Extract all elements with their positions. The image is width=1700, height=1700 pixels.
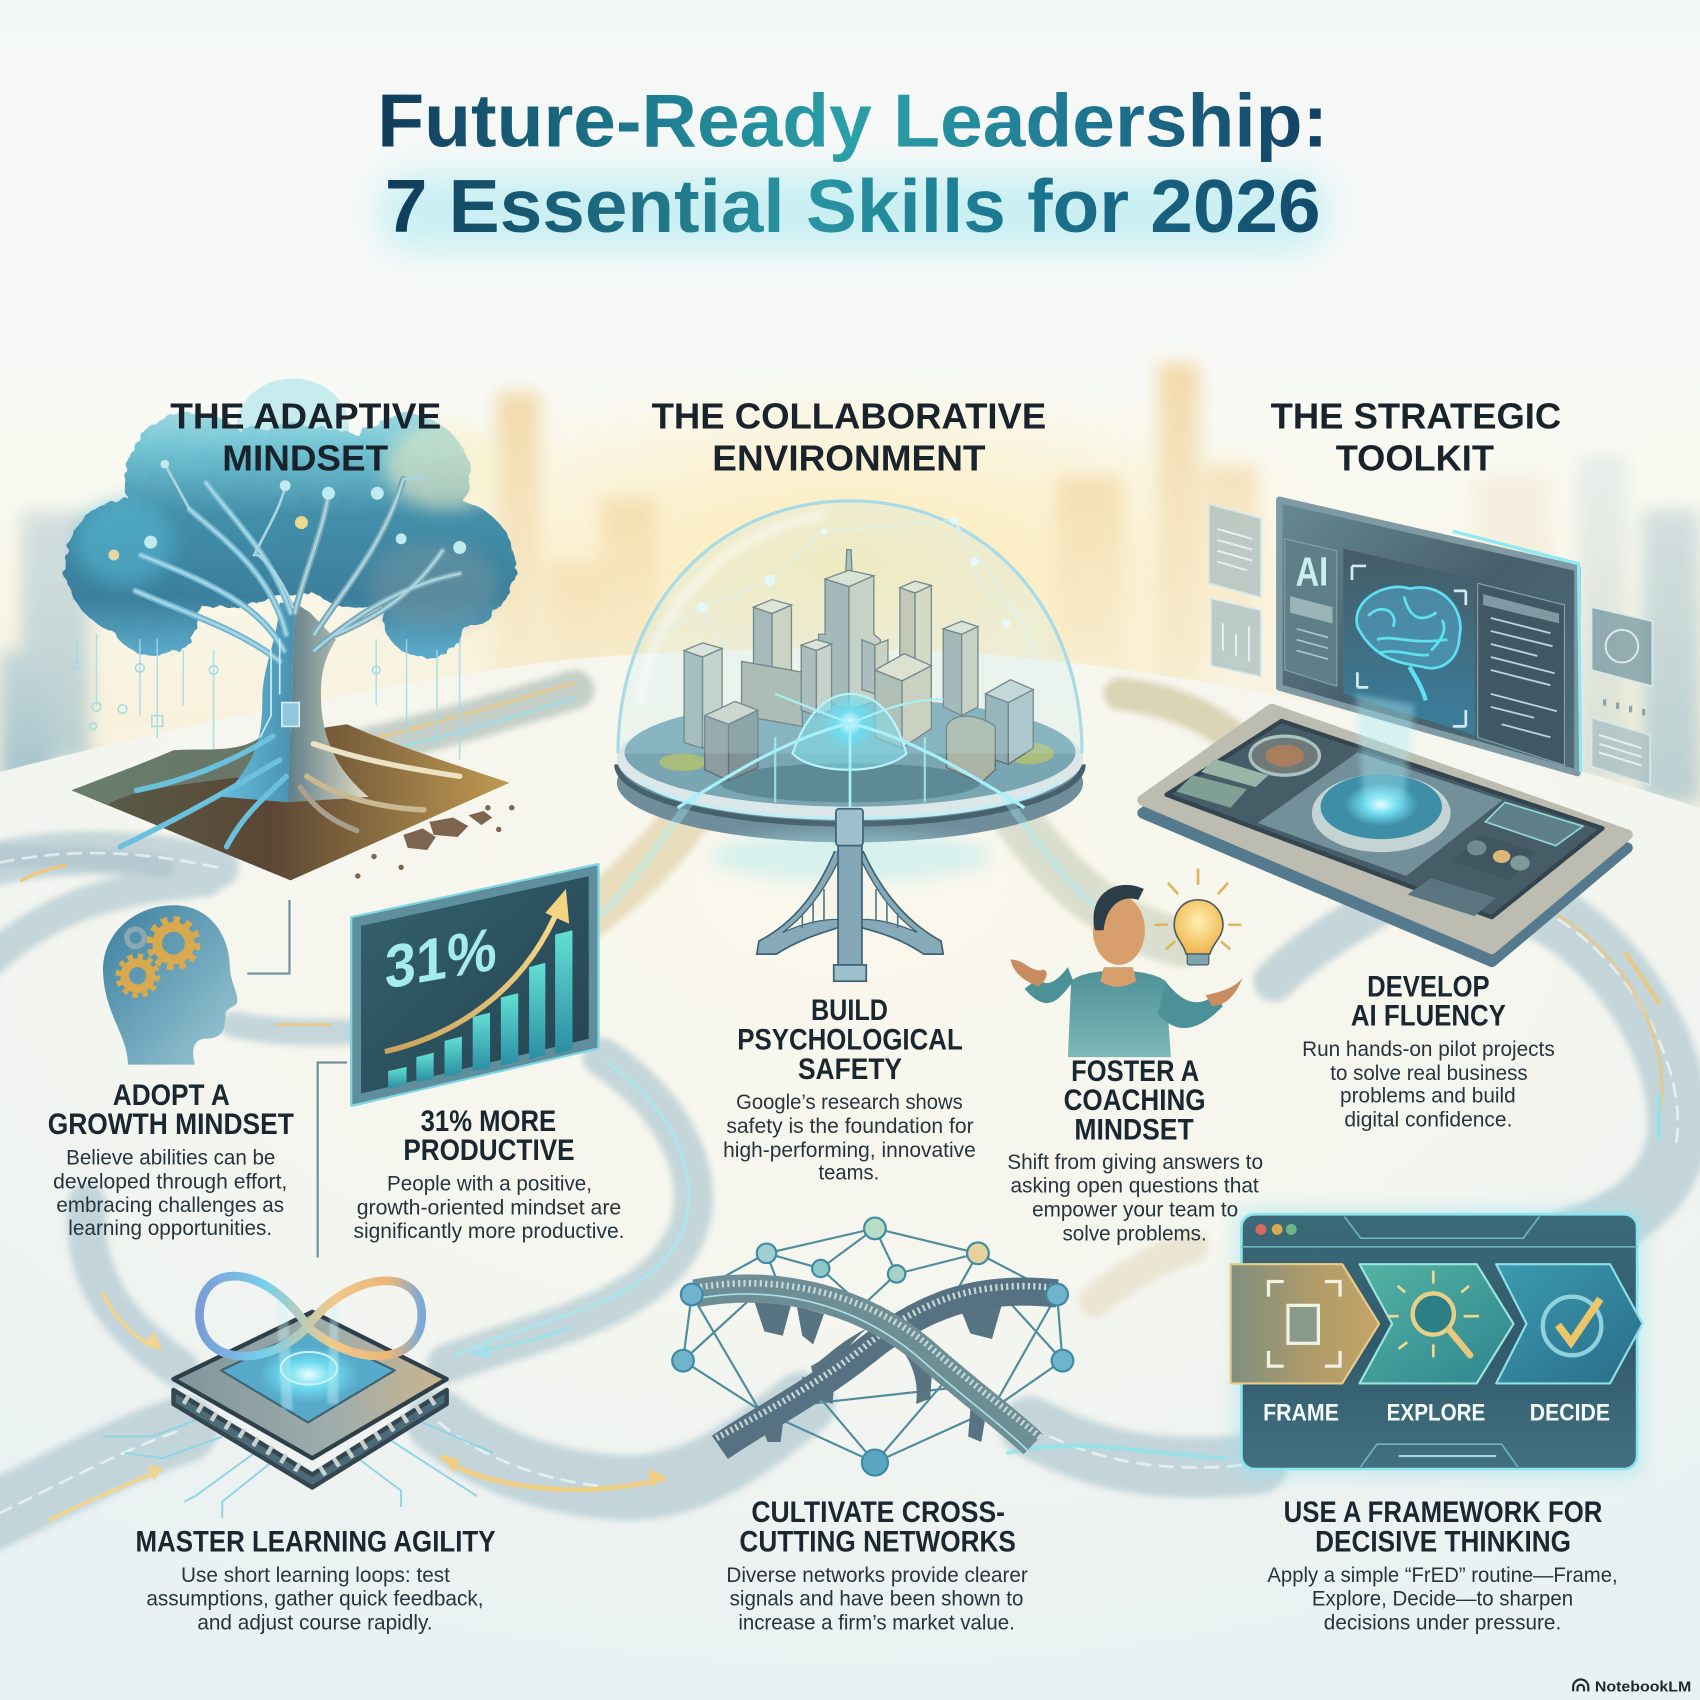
text block: 31% more productive <box>353 1106 624 1243</box>
tree crown <box>65 378 515 657</box>
tree trunk and branches <box>74 460 466 847</box>
panel: FrED framework <box>1231 1208 1645 1478</box>
explore chevron <box>1360 1264 1514 1383</box>
text block: develop AI fluency <box>1302 971 1555 1131</box>
text block: adopt a growth mindset: GROWTH MINDSET <box>48 1109 294 1141</box>
dome buildings <box>684 550 1033 783</box>
title: 7 Essential Skills for 2026 <box>385 164 1321 248</box>
text block: build psychological safety: SAFETY <box>798 1054 902 1086</box>
dome base <box>617 698 1083 842</box>
connector lines <box>247 900 347 1258</box>
side holo panels <box>1209 504 1652 785</box>
person <box>1010 885 1242 1057</box>
text block: 31% more productive: 31% MORE <box>421 1106 556 1138</box>
title: Future-Ready Leadership: <box>377 78 1328 162</box>
section heading: adaptive mindset: THE ADAPTIVE <box>170 396 441 436</box>
text block: foster a coaching mindset: empower your team to <box>1032 1196 1238 1221</box>
text block: 31% more productive: PRODUCTIVE <box>403 1135 575 1167</box>
growth arrow <box>385 889 569 1052</box>
section heading: strategic toolkit <box>1271 396 1561 479</box>
step labels: FRAME <box>1263 1399 1339 1426</box>
text block: develop AI fluency: DEVELOP <box>1367 971 1490 1003</box>
title <box>377 78 1328 252</box>
icon: head with gears <box>103 905 237 1065</box>
crossing bridges <box>695 1283 1057 1451</box>
text block: adopt a growth mindset <box>48 1080 294 1240</box>
step labels: DECIDE <box>1530 1399 1610 1426</box>
illustration: cross-cutting network bridges <box>672 1218 1073 1476</box>
text block: adopt a growth mindset: learning opportunities. <box>68 1215 272 1240</box>
text block: foster a coaching mindset <box>1007 1056 1263 1245</box>
text block: develop AI fluency: to solve real business <box>1330 1060 1528 1085</box>
floor plane <box>0 648 1700 1700</box>
dome glass <box>618 501 1082 754</box>
text block: 31% more productive: People with a positive, <box>387 1170 592 1195</box>
decide chevron <box>1496 1264 1643 1383</box>
text block: framework for decisive thinking: Apply a simple “FrED” routine—Frame, <box>1267 1562 1618 1587</box>
section heading: adaptive mindset <box>170 396 441 479</box>
text block: build psychological safety: teams. <box>819 1160 879 1185</box>
text block: build psychological safety: safety is the foundation for <box>726 1113 974 1138</box>
step labels <box>1263 1399 1610 1426</box>
text block: adopt a growth mindset: embracing challenges as <box>56 1192 284 1217</box>
NotebookLM watermark: NotebookLM <box>1595 1678 1691 1695</box>
text block: master learning agility <box>136 1526 496 1635</box>
text block: framework for decisive thinking: USE A FRAMEWORK FOR <box>1284 1497 1602 1529</box>
text block: develop AI fluency: problems and build <box>1340 1083 1516 1108</box>
text block: foster a coaching mindset: MINDSET <box>1074 1114 1194 1146</box>
illustration: dome city <box>600 501 1117 981</box>
illustration: AI screen and tablet <box>1143 500 1652 962</box>
main AI screen: AI <box>1296 548 1328 594</box>
section heading: adaptive mindset: MINDSET <box>222 439 388 479</box>
text block: foster a coaching mindset: asking open questions that <box>1010 1173 1259 1198</box>
step labels: EXPLORE <box>1387 1399 1485 1426</box>
text block: cultivate cross-cutting networks: increase a firm’s market value. <box>738 1610 1015 1635</box>
text block: master learning agility: and adjust course rapidly. <box>197 1610 433 1635</box>
text block: cultivate cross-cutting networks: signals and have been shown to <box>730 1586 1023 1611</box>
window dots <box>1255 1224 1297 1235</box>
text block: 31% more productive: growth-oriented mindset are <box>357 1194 621 1219</box>
text block: master learning agility: MASTER LEARNING AGILITY <box>136 1526 496 1558</box>
chip body <box>173 1296 447 1488</box>
illustration: adaptive tree <box>65 378 515 880</box>
text block: framework for decisive thinking <box>1267 1497 1618 1635</box>
chart panel: 31% productive: 31% <box>385 915 497 1002</box>
section heading: collaborative environment: ENVIRONMENT <box>712 439 986 479</box>
chart panel: 31% productive <box>351 864 598 1106</box>
main AI screen <box>1279 500 1581 773</box>
tree soil <box>72 724 514 880</box>
text block: cultivate cross-cutting networks: Diverse networks provide clearer <box>726 1562 1028 1587</box>
text block: adopt a growth mindset: Believe abilities can be <box>66 1144 275 1169</box>
section heading: strategic toolkit: THE STRATEGIC <box>1271 396 1561 436</box>
text block: develop AI fluency: Run hands-on pilot projects <box>1302 1036 1555 1061</box>
text block: foster a coaching mindset: solve problems. <box>1062 1220 1207 1245</box>
text block: develop AI fluency: AI FLUENCY <box>1351 1001 1506 1033</box>
text block: cultivate cross-cutting networks: CUTTING NETWORKS <box>739 1526 1016 1558</box>
section heading: collaborative environment: THE COLLABORATIVE <box>652 396 1046 436</box>
text block: develop AI fluency: digital confidence. <box>1344 1106 1512 1131</box>
text block: build psychological safety: high-performing, innovative <box>723 1137 976 1162</box>
text block: master learning agility: Use short learning loops: test <box>181 1562 450 1587</box>
text block: adopt a growth mindset: developed through effort, <box>53 1168 287 1193</box>
dome network glow <box>600 694 1117 922</box>
text block: foster a coaching mindset: Shift from giving answers to <box>1007 1149 1263 1174</box>
tablet <box>1143 694 1627 962</box>
flowing roads <box>0 683 1678 1523</box>
text block: cultivate cross-cutting networks: CULTIVATE CROSS- <box>751 1497 1005 1529</box>
text block: framework for decisive thinking: decisions under pressure. <box>1324 1610 1561 1635</box>
text block: adopt a growth mindset: ADOPT A <box>113 1080 230 1112</box>
illustration: chip with infinity loop <box>103 1276 493 1518</box>
bridge tower <box>757 809 943 981</box>
illustration: coach with lightbulb <box>1010 870 1242 1057</box>
text block: framework for decisive thinking: Explore, Decide—to sharpen <box>1312 1586 1573 1611</box>
text block: foster a coaching mindset: FOSTER A <box>1071 1056 1199 1088</box>
text block: build psychological safety: Google’s research shows <box>736 1089 963 1114</box>
text block: framework for decisive thinking: DECISIVE THINKING <box>1315 1526 1571 1558</box>
section heading: collaborative environment <box>652 396 1046 479</box>
infinity loop <box>199 1276 422 1356</box>
text block: 31% more productive: significantly more productive. <box>353 1218 624 1243</box>
chip wires <box>103 1420 493 1518</box>
frame chevron <box>1231 1264 1379 1383</box>
lightbulb <box>1156 870 1240 965</box>
bridge piers <box>754 1299 1003 1442</box>
text block: build psychological safety: BUILD <box>811 995 888 1027</box>
network edges <box>683 1228 1062 1463</box>
network nodes <box>672 1218 1073 1476</box>
text block: cultivate cross-cutting networks <box>726 1497 1028 1635</box>
text block: build psychological safety: PSYCHOLOGICAL <box>737 1024 963 1056</box>
bars <box>388 930 572 1089</box>
text block: build psychological safety <box>723 995 976 1185</box>
section heading: strategic toolkit: TOOLKIT <box>1336 439 1494 479</box>
text block: foster a coaching mindset: COACHING <box>1064 1085 1206 1117</box>
text block: master learning agility: assumptions, gather quick feedback, <box>146 1586 484 1611</box>
